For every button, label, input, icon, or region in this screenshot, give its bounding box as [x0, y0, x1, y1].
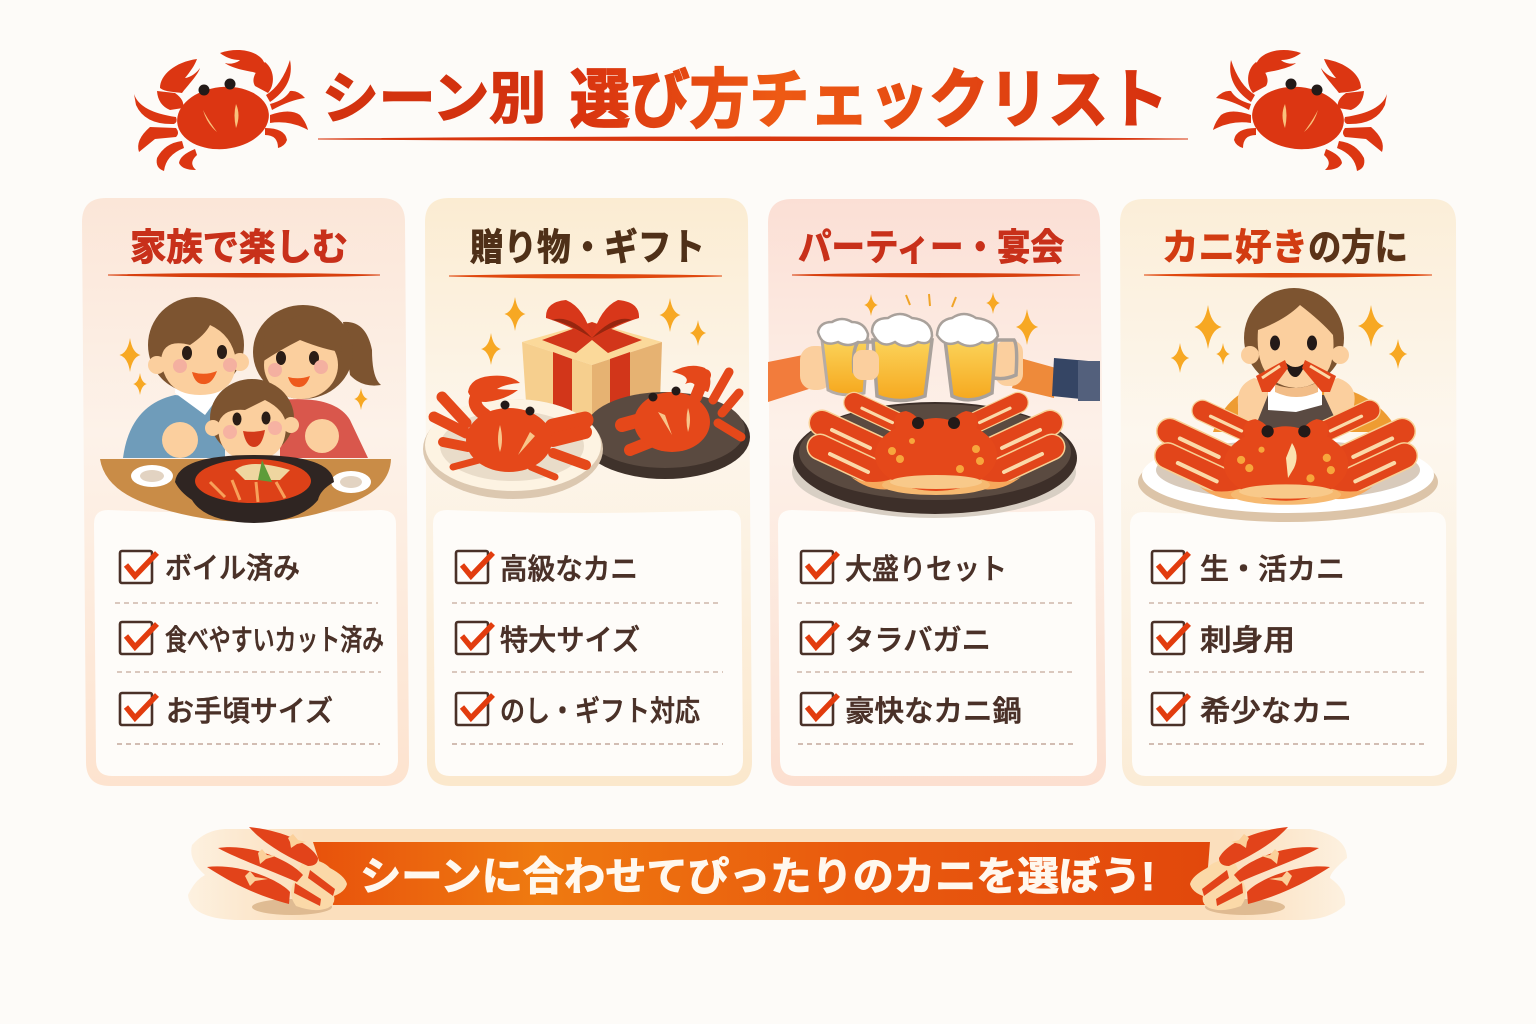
icon: crab right — [1213, 50, 1387, 171]
item — [120, 622, 384, 657]
item — [456, 551, 638, 586]
illustration: family with crab pot — [100, 297, 391, 523]
heading: パーティー・宴会 — [798, 227, 1064, 268]
item — [456, 693, 700, 728]
item — [1152, 551, 1345, 586]
item: 刺身用 — [1200, 624, 1295, 657]
item — [801, 551, 1007, 586]
panel: crab lovers — [1120, 199, 1457, 786]
item — [120, 693, 333, 728]
item: ボイル済み — [165, 552, 300, 585]
item — [1152, 622, 1295, 657]
item: 豪快なカニ鍋 — [845, 695, 1022, 728]
icon: crab claws left — [207, 827, 347, 915]
item: 高級なカニ — [500, 553, 638, 586]
item: 特大サイズ — [500, 624, 640, 657]
heading: カニ好き — [1162, 227, 1308, 268]
panel: family — [82, 198, 409, 786]
heading: scene: シーン別 — [322, 67, 546, 130]
item — [801, 622, 991, 657]
panel: party — [768, 199, 1106, 786]
heading rule — [449, 274, 722, 278]
card: party checklist — [778, 510, 1097, 776]
illustration: beer toast and crab plate — [768, 292, 1100, 518]
card: crab lovers checklist — [1130, 512, 1447, 776]
icon: crab left — [134, 50, 308, 171]
card: family checklist — [94, 510, 398, 776]
heading rule — [108, 274, 380, 277]
item — [1152, 693, 1352, 728]
card: gift checklist — [433, 510, 743, 776]
title underline — [318, 137, 1188, 140]
illustration: person eating crab — [1138, 288, 1438, 522]
item: 希少なカニ — [1200, 695, 1352, 728]
crab on dark plate — [622, 366, 741, 452]
illustration: gift box and crabs — [423, 297, 750, 499]
heading: 家族で楽しむ — [130, 227, 348, 268]
item — [456, 622, 640, 657]
crab on light plate — [434, 376, 586, 477]
title — [322, 64, 1168, 136]
item: 食べやすいカット済み — [165, 624, 384, 657]
banner text: シーンに合わせてぴったりのカニを選ぼう! — [360, 855, 1155, 899]
item: 大盛りセット — [845, 553, 1007, 586]
panel: gift — [423, 198, 752, 786]
heading — [1162, 227, 1408, 268]
item: のし・ギフト対応 — [500, 695, 700, 728]
item: お手頃サイズ — [166, 695, 333, 728]
heading: checklist: 選び方チェックリスト — [570, 64, 1168, 136]
heading rule — [1144, 274, 1432, 277]
heading: 贈り物・ギフト — [470, 227, 705, 268]
item — [120, 551, 300, 585]
heading rule — [792, 274, 1080, 277]
banner — [188, 827, 1347, 920]
heading: の方に — [1308, 227, 1408, 268]
item: 生・活カニ — [1200, 553, 1345, 586]
item: タラバガニ — [845, 624, 991, 657]
icon: crab claws right — [1190, 827, 1330, 915]
